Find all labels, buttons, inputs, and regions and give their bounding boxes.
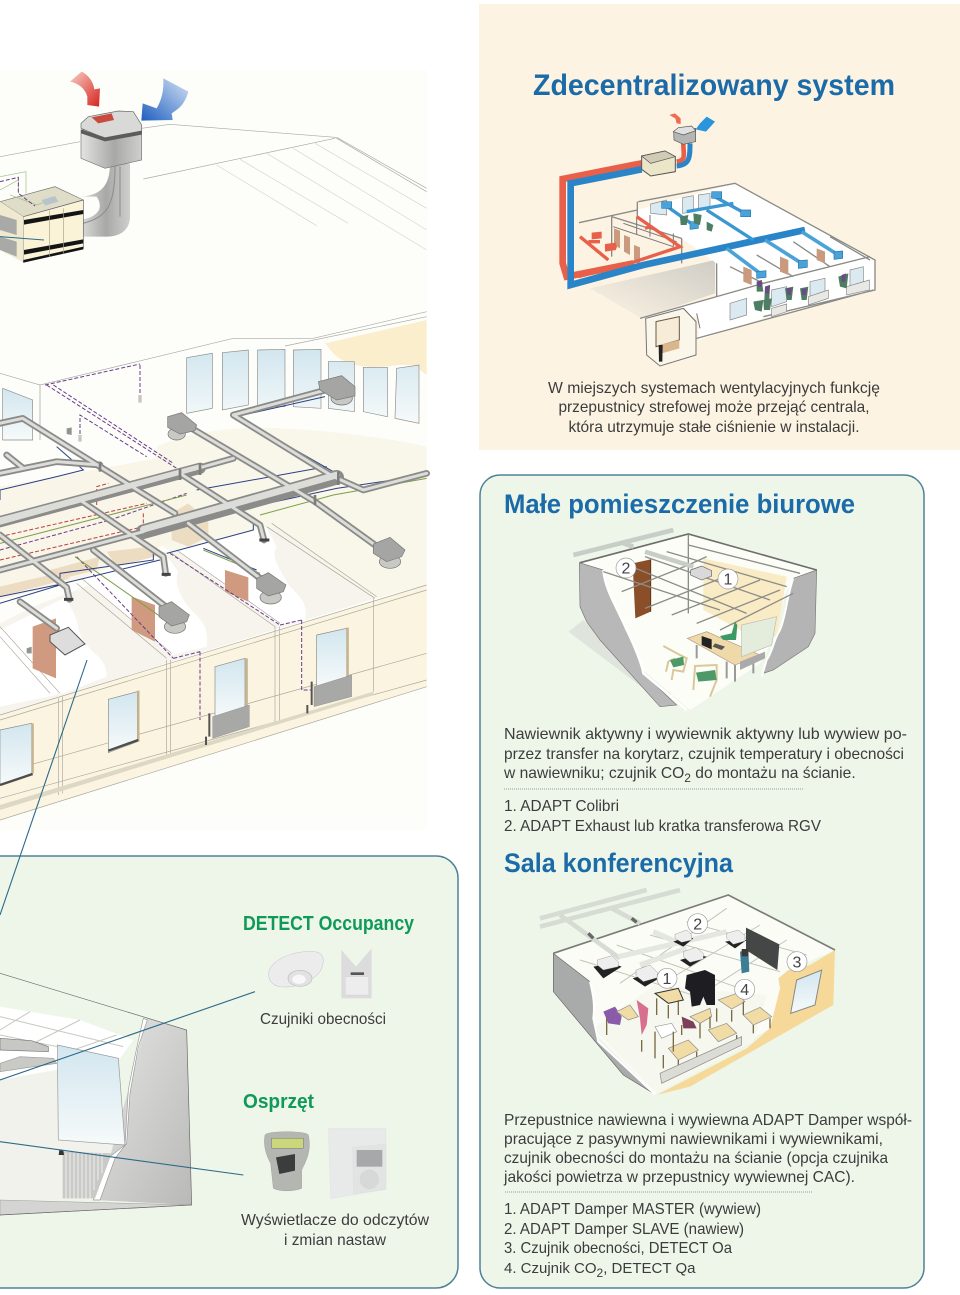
ceiling tiles bbox=[0, 1007, 133, 1080]
air handling unit roof bbox=[0, 187, 83, 217]
entrance block bbox=[646, 308, 696, 366]
terminal diffuser 5 bbox=[159, 602, 189, 633]
rooftop bends bbox=[677, 143, 684, 162]
wall sensors bbox=[27, 427, 72, 653]
duct junction collars bbox=[100, 462, 338, 505]
tan soffits bbox=[0, 503, 208, 597]
list: small office products: 2. ADAPT Exhaust lub kratka transferowa RGV bbox=[504, 818, 822, 835]
table legs and chairs bbox=[607, 998, 770, 1072]
diffuser plate 3 bbox=[680, 947, 707, 967]
side wall left bbox=[579, 563, 677, 707]
desk legs bbox=[697, 645, 753, 682]
terminal diffuser 1 bbox=[168, 413, 197, 440]
rooms: white cut floor 1 bbox=[0, 597, 107, 707]
person in entrance bbox=[659, 345, 663, 362]
list: conference room products: 3. Czujnik obecności, DETECT Oa bbox=[504, 1240, 732, 1257]
badge 2 bbox=[688, 914, 708, 934]
text: small office description: do montażu na ścianie. bbox=[691, 765, 856, 782]
red supply duct bbox=[563, 163, 642, 277]
badge 1 bbox=[718, 569, 738, 589]
ducts bbox=[573, 530, 693, 567]
doors bbox=[33, 570, 248, 678]
tan ceiling void bbox=[325, 320, 427, 375]
caption: displays: i zmian nastaw bbox=[284, 1232, 387, 1249]
badge 1 bbox=[657, 968, 677, 988]
active diffuser bbox=[691, 566, 712, 580]
black straps bbox=[23, 210, 83, 263]
ceiling ducts bbox=[0, 1038, 48, 1052]
arrow: exhaust air bbox=[70, 72, 100, 107]
active diffuser unit bbox=[50, 627, 85, 655]
roof unit red damper bbox=[92, 113, 114, 123]
big upper duct highlight bbox=[0, 467, 200, 520]
title: Zdecentralizowany system bbox=[533, 69, 895, 102]
caption: displays: Wyświetlacze do odczytów bbox=[241, 1212, 430, 1229]
illustration: room detail bbox=[0, 973, 255, 1215]
rooms: white cut floor 2 bbox=[82, 558, 207, 655]
intake arrow bbox=[696, 117, 715, 132]
window: front 3 bbox=[317, 628, 347, 687]
ducts highlight bbox=[0, 389, 427, 628]
rooftop blue bend bbox=[677, 143, 690, 166]
big duct highlight bbox=[143, 475, 337, 529]
illustration: conference room bbox=[540, 890, 835, 1095]
monitor bbox=[702, 636, 712, 649]
blackboard bbox=[746, 928, 779, 970]
outside ducts bbox=[540, 890, 680, 958]
icon: ceiling occupancy sensor bbox=[269, 951, 323, 987]
terminal diffuser 3 bbox=[373, 537, 405, 568]
list: conference room products: 4. Czujnik CO bbox=[504, 1260, 597, 1277]
building walls bbox=[579, 183, 875, 338]
illustration: system overview bbox=[563, 113, 875, 366]
front wall base shading bbox=[0, 692, 373, 810]
terminal diffuser 4 bbox=[257, 573, 286, 604]
roof outline bbox=[0, 124, 427, 192]
dotted line bbox=[505, 1191, 813, 1193]
table 8 bbox=[617, 1005, 638, 1020]
radiator bbox=[660, 1037, 742, 1083]
roof ribs bbox=[217, 143, 427, 250]
control wiring bbox=[0, 172, 50, 205]
wall end lines bbox=[683, 308, 700, 355]
top edge bbox=[553, 895, 835, 953]
list: conference room products: , DETECT Qa bbox=[603, 1260, 696, 1277]
door bbox=[633, 559, 651, 618]
hanging fixtures bbox=[80, 395, 140, 442]
icon: handheld display bbox=[264, 1132, 309, 1191]
badge 2: 2 bbox=[693, 916, 702, 933]
floor band bbox=[0, 1200, 192, 1215]
window frames bbox=[33, 628, 348, 773]
keyboard bbox=[713, 643, 725, 650]
radiator bbox=[740, 652, 765, 670]
leader on unit bbox=[0, 237, 44, 240]
blue supply duct bbox=[571, 169, 805, 285]
room interior bbox=[580, 534, 817, 710]
list: small office products bbox=[504, 798, 822, 835]
line: leader to active diffuser bbox=[0, 660, 87, 915]
green lines bbox=[0, 478, 427, 623]
side openings bbox=[0, 215, 17, 257]
duct segments bbox=[0, 1057, 57, 1072]
radiators bbox=[213, 675, 352, 738]
caption: displays bbox=[241, 1212, 430, 1249]
back wall bbox=[0, 1060, 120, 1200]
table 2 bbox=[690, 1008, 712, 1023]
arrow: intake air bbox=[141, 78, 188, 121]
badge 2: 2 bbox=[622, 561, 631, 578]
window glass bbox=[742, 617, 777, 657]
roof unit body bbox=[81, 128, 142, 168]
heading: accessories: Osprzęt bbox=[243, 1091, 314, 1113]
list: conference room products: 2. ADAPT Damper SLAVE (nawiew) bbox=[504, 1221, 744, 1238]
ducts outer bbox=[0, 389, 427, 628]
list: conference room products bbox=[504, 1201, 761, 1280]
text: small office description: w nawiewniku; czujnik CO bbox=[504, 765, 684, 782]
red outlets bbox=[592, 232, 616, 252]
list: conference room products: 2 bbox=[597, 1266, 604, 1280]
text: intro caption: W miejszych systemach wentylacyjnych funkcję bbox=[548, 380, 880, 397]
wall outline bbox=[0, 973, 192, 1215]
standing person bbox=[637, 1000, 648, 1035]
nozzles bbox=[64, 540, 269, 599]
building floor bbox=[612, 183, 875, 340]
caption: occupancy sensors: Czujniki obecności bbox=[260, 1011, 386, 1028]
front wall lines bbox=[0, 585, 427, 820]
duct bends bbox=[77, 163, 130, 237]
badge 1: 1 bbox=[663, 971, 672, 988]
partition walls bbox=[613, 215, 677, 247]
diffuser plate 4 bbox=[673, 930, 693, 947]
illustration: main building cutaway with ducts bbox=[0, 364, 427, 820]
badge 2 bbox=[616, 558, 636, 578]
radiator valves bbox=[206, 682, 312, 745]
entrance door glass bbox=[656, 317, 679, 347]
people and chairs bbox=[680, 213, 848, 312]
white cut edge right bbox=[762, 578, 793, 677]
visitor chair 2 bbox=[693, 665, 717, 697]
illustration: rooftop unit and air handling unit bbox=[0, 72, 427, 440]
back-left window bbox=[3, 388, 33, 440]
text: small office description: Nawiewnik aktywny i wywiewnik aktywny lub wywiew po- bbox=[504, 726, 907, 743]
air handling unit front bbox=[23, 200, 83, 262]
list: conference room products: 1. ADAPT Damper MASTER (wywiew) bbox=[504, 1201, 761, 1218]
table 1 bbox=[655, 988, 683, 1003]
dotted line bbox=[504, 788, 804, 790]
line: leader to display bbox=[0, 1142, 243, 1175]
radiator ribs bbox=[66, 1153, 102, 1198]
valve bbox=[59, 1150, 64, 1155]
ceiling grid bbox=[603, 535, 800, 630]
sensor on unit bbox=[42, 196, 58, 206]
navy control lines bbox=[0, 397, 427, 603]
wall cut edge bbox=[93, 1018, 147, 1200]
big duct outer bbox=[143, 477, 337, 532]
side wall right bbox=[763, 570, 817, 673]
text: intro caption: która utrzymuje stałe ciśnienie w instalacji. bbox=[568, 419, 860, 436]
blue diffusers bbox=[662, 192, 843, 278]
rooftop unit top bbox=[673, 126, 696, 135]
back wall line bbox=[39, 385, 41, 440]
icon: wall display bbox=[328, 1128, 386, 1199]
table 6 bbox=[668, 1040, 698, 1060]
floor bbox=[593, 985, 767, 1093]
terminal diffuser 2 bbox=[318, 376, 355, 405]
text: small office description: przez transfer na korytarz, czujnik temperatury i obecności bbox=[504, 746, 904, 763]
shadow bbox=[590, 260, 715, 318]
blue branches bbox=[727, 232, 838, 273]
table 5 bbox=[708, 1023, 737, 1042]
left office floor bbox=[579, 210, 680, 263]
text: conference room description: czujnik obecności do montażu na ścianie (opcja czujnika bbox=[504, 1150, 888, 1167]
floor left part bbox=[0, 527, 375, 715]
blue upper branches bbox=[665, 195, 753, 240]
seated person centre bbox=[682, 1017, 697, 1028]
side wall bbox=[93, 1018, 192, 1205]
outer wall right bbox=[657, 950, 835, 1095]
table 3 bbox=[718, 993, 745, 1009]
badge 4 bbox=[735, 979, 755, 999]
side wall left bbox=[553, 953, 653, 1093]
ceiling floor plane bbox=[157, 427, 427, 598]
white cut edge bbox=[590, 982, 655, 1094]
illustration background bbox=[0, 70, 427, 830]
text: conference room description bbox=[503, 1112, 912, 1186]
window: front 2 bbox=[215, 658, 245, 718]
duct seam bbox=[83, 167, 120, 223]
people accents bbox=[757, 273, 846, 295]
radiator bbox=[63, 1152, 112, 1198]
front windows bbox=[651, 193, 863, 320]
dashed cables red bbox=[0, 483, 147, 560]
table 4 bbox=[655, 1023, 677, 1038]
heading: DETECT Occupancy: DETECT Occupancy bbox=[243, 913, 415, 935]
air handling unit bbox=[642, 151, 675, 176]
floor shadow bbox=[568, 620, 670, 707]
rooms: white cut floor 3 bbox=[177, 528, 306, 625]
ceiling grid bbox=[580, 908, 807, 998]
back windows bbox=[187, 349, 419, 423]
teacher head bbox=[742, 949, 748, 956]
text: conference room description: jakości powietrza w przepustnicy wywiewnej CAC). bbox=[503, 1169, 855, 1186]
text: small office description bbox=[503, 726, 907, 785]
unit top bbox=[642, 151, 675, 163]
illustration: small office bbox=[568, 530, 817, 710]
diffuser plate 1 bbox=[593, 956, 622, 978]
roof unit cap bbox=[81, 111, 142, 138]
heading: small office: Małe pomieszczenie biurowe bbox=[504, 489, 855, 519]
heading: conference room: Sala konferencyjna bbox=[504, 848, 734, 878]
door edge bbox=[649, 559, 652, 612]
seat 2 bbox=[696, 670, 717, 682]
text: small office description: 2 bbox=[684, 771, 691, 785]
doors bbox=[614, 228, 825, 285]
office chair bbox=[720, 622, 737, 640]
badge 4: 4 bbox=[740, 982, 749, 999]
diffuser ducts bbox=[618, 932, 727, 965]
window bbox=[57, 1045, 125, 1145]
window bbox=[791, 970, 822, 1013]
badge 3: 3 bbox=[793, 954, 802, 971]
panel: sensors and accessories bbox=[0, 856, 458, 1288]
badge 1: 1 bbox=[724, 572, 733, 589]
desk bbox=[687, 632, 760, 665]
room partitions bbox=[0, 523, 377, 693]
wall radiators bbox=[772, 280, 869, 317]
exhaust arrow bbox=[669, 113, 681, 124]
dashed cables purple bbox=[0, 364, 312, 720]
teacher bbox=[740, 950, 749, 973]
text: intro caption bbox=[548, 380, 880, 436]
badge 3 bbox=[787, 952, 807, 972]
entrance door lower bbox=[662, 340, 679, 353]
ceiling grid bbox=[0, 1012, 123, 1058]
line: leader to ceiling sensor bbox=[0, 992, 255, 1080]
icon: wall occupancy sensor bbox=[341, 948, 372, 998]
text: conference room description: pracujące z pasywnymi nawiewnikami i wywiewnikami, bbox=[504, 1131, 883, 1148]
red branches bbox=[578, 217, 680, 277]
big upper duct outer bbox=[0, 468, 200, 522]
panel: small office room bbox=[480, 475, 924, 1288]
window: front 4 bbox=[0, 723, 32, 785]
window: front 1 bbox=[108, 692, 137, 753]
air handling unit side bbox=[0, 202, 23, 262]
text: conference room description: Przepustnice nawiewna i wywiewna ADAPT Damper współ- bbox=[504, 1112, 912, 1129]
window sills bbox=[0, 740, 138, 785]
seated person left bbox=[603, 1007, 622, 1025]
front wall bbox=[0, 585, 427, 820]
bottom building ceiling line bbox=[0, 312, 427, 385]
seat 1 bbox=[670, 657, 684, 667]
rooftop unit body bbox=[674, 128, 696, 144]
white cut edge left bbox=[603, 570, 687, 710]
top edge bbox=[580, 534, 817, 570]
diffuser plate 5 bbox=[725, 930, 747, 948]
table 7 bbox=[743, 1007, 772, 1025]
panel: decentralised system bbox=[479, 4, 960, 450]
group of people bbox=[685, 970, 715, 1007]
list: small office products: 1. ADAPT Colibri bbox=[504, 798, 619, 815]
visitor chair 1 bbox=[663, 646, 687, 680]
duct collars bbox=[588, 918, 637, 938]
dashed cabling bbox=[0, 177, 35, 206]
diffuser plate 2 bbox=[633, 965, 665, 987]
window wall bbox=[703, 558, 787, 637]
roof unit band bbox=[81, 129, 142, 141]
panels bbox=[49, 208, 63, 257]
text: intro caption: przepustnicy strefowej może przejąć centrala, bbox=[558, 399, 870, 416]
room interior bbox=[553, 895, 835, 1093]
upper left cream bbox=[0, 457, 187, 600]
